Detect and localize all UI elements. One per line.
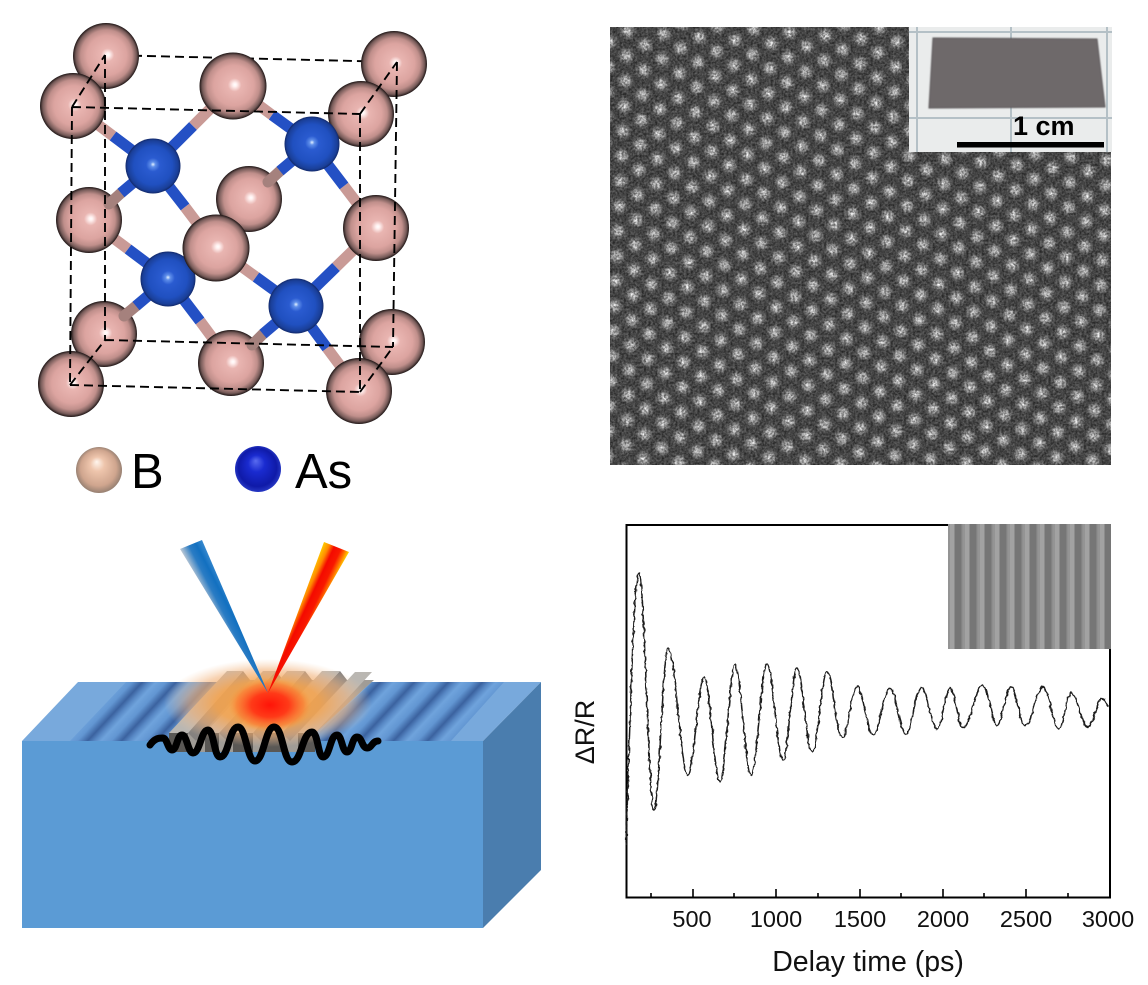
label: As: As bbox=[295, 445, 352, 499]
x-axis tick labels: 500 bbox=[672, 906, 712, 932]
block side face bbox=[483, 682, 541, 928]
front boron atoms bbox=[38, 52, 409, 424]
lattice micrograph bbox=[610, 27, 1111, 465]
block top face bbox=[22, 682, 541, 741]
label: B: B bbox=[131, 445, 164, 499]
panel: transient grating schematic bbox=[22, 540, 541, 928]
scale label: 1 cm bbox=[1013, 111, 1075, 141]
icon: arsenic sphere bbox=[235, 446, 281, 492]
probe beam (blue) bbox=[180, 540, 268, 693]
bond stubs in front of rear atoms bbox=[109, 171, 280, 345]
panel: STEM lattice image bbox=[610, 27, 1112, 465]
pump beam (red) bbox=[268, 542, 349, 693]
x-axis tick labels: 2000 bbox=[917, 906, 969, 932]
metal grating bbox=[169, 671, 374, 752]
bonds passing behind rear atoms bbox=[89, 220, 231, 363]
plot frame bbox=[626, 525, 1110, 898]
x-axis ticks bbox=[651, 889, 1068, 897]
x-axis tick labels: 1000 bbox=[750, 906, 802, 932]
arsenic atoms bbox=[126, 116, 340, 334]
x-axis title: Delay time (ps) bbox=[772, 946, 964, 978]
central boron atom bbox=[182, 214, 250, 282]
heat glow bbox=[164, 659, 372, 747]
arsenic-boron bonds, pink half bbox=[73, 86, 376, 391]
chart: reflectivity versus delay time bbox=[570, 524, 1134, 978]
icon: boron sphere bbox=[76, 447, 122, 493]
x-axis tick labels bbox=[672, 906, 1134, 932]
rear boron atoms bbox=[56, 23, 427, 396]
x-axis tick labels: 1500 bbox=[834, 906, 886, 932]
y-axis title: ΔR/R bbox=[570, 700, 600, 764]
block front face bbox=[22, 741, 483, 928]
x-axis tick labels: 2500 bbox=[1000, 906, 1052, 932]
arsenic-boron bonds, blue half bbox=[113, 115, 344, 348]
right excited stripes bbox=[310, 682, 504, 741]
dashed unit cell edges bbox=[70, 55, 397, 392]
x-axis tick labels: 3000 bbox=[1082, 906, 1134, 932]
inset: grating micrograph bbox=[948, 524, 1111, 649]
oscillation trace bbox=[626, 573, 1109, 845]
pump hot spot bbox=[228, 678, 312, 732]
left excited stripes bbox=[70, 682, 225, 741]
surface acoustic wave bbox=[150, 727, 378, 762]
inset: sample photo bbox=[909, 27, 1112, 152]
panel: BAs crystal structure bbox=[38, 23, 427, 424]
scale bar bbox=[957, 142, 1104, 148]
dashed edge: rear top of unit cell bbox=[105, 55, 397, 62]
legend: element key bbox=[76, 445, 352, 499]
